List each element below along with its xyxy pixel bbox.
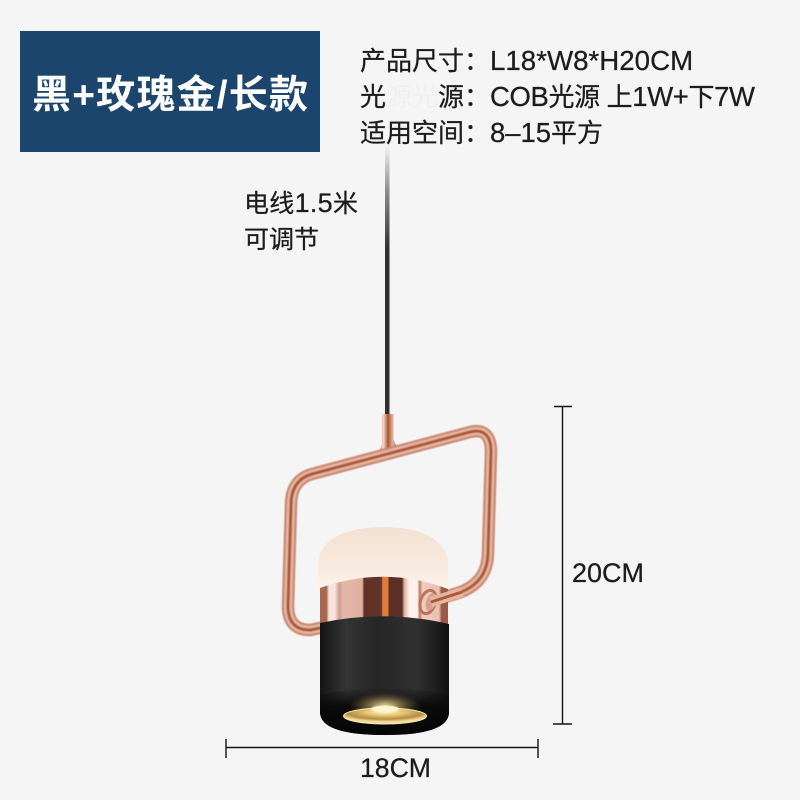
stem connector	[379, 414, 397, 452]
power cord	[385, 145, 390, 417]
glowing bulb	[344, 693, 426, 724]
rose gold band	[320, 577, 448, 625]
spec: light source: 源：	[438, 82, 490, 112]
frosted diffuser	[318, 527, 448, 594]
spec: light source: 源光	[386, 82, 438, 112]
width dimension: 18CM	[360, 753, 431, 783]
spec: light source: 光	[360, 82, 386, 112]
black shade	[320, 616, 449, 735]
height dimension: 20CM	[572, 558, 644, 588]
spec: product size	[360, 45, 693, 76]
specifications text block	[360, 45, 755, 148]
spec: applicable space: 适用空间：	[360, 118, 490, 148]
cord length note	[244, 188, 358, 254]
height dimension	[553, 406, 644, 724]
spec: product size: L18*W8*H20CM	[490, 45, 693, 76]
title banner: 黑+玫瑰金/长款	[32, 74, 308, 117]
spec: applicable space	[360, 117, 603, 148]
title banner	[20, 31, 320, 152]
cord length note: 电线1.5米	[244, 188, 358, 218]
dark lower rim	[320, 688, 449, 735]
spec: product size: 产品尺寸：	[360, 46, 490, 76]
pendant lamp	[288, 145, 491, 735]
width dimension	[226, 739, 538, 783]
cord length note: 可调节	[244, 226, 319, 254]
spec: light source: COB光源 上1W+下7W	[490, 81, 755, 112]
pivot bracket	[417, 588, 462, 616]
spec: light source	[360, 81, 755, 112]
spec: applicable space: 8–15平方	[490, 117, 603, 148]
rose gold frame	[288, 431, 491, 630]
